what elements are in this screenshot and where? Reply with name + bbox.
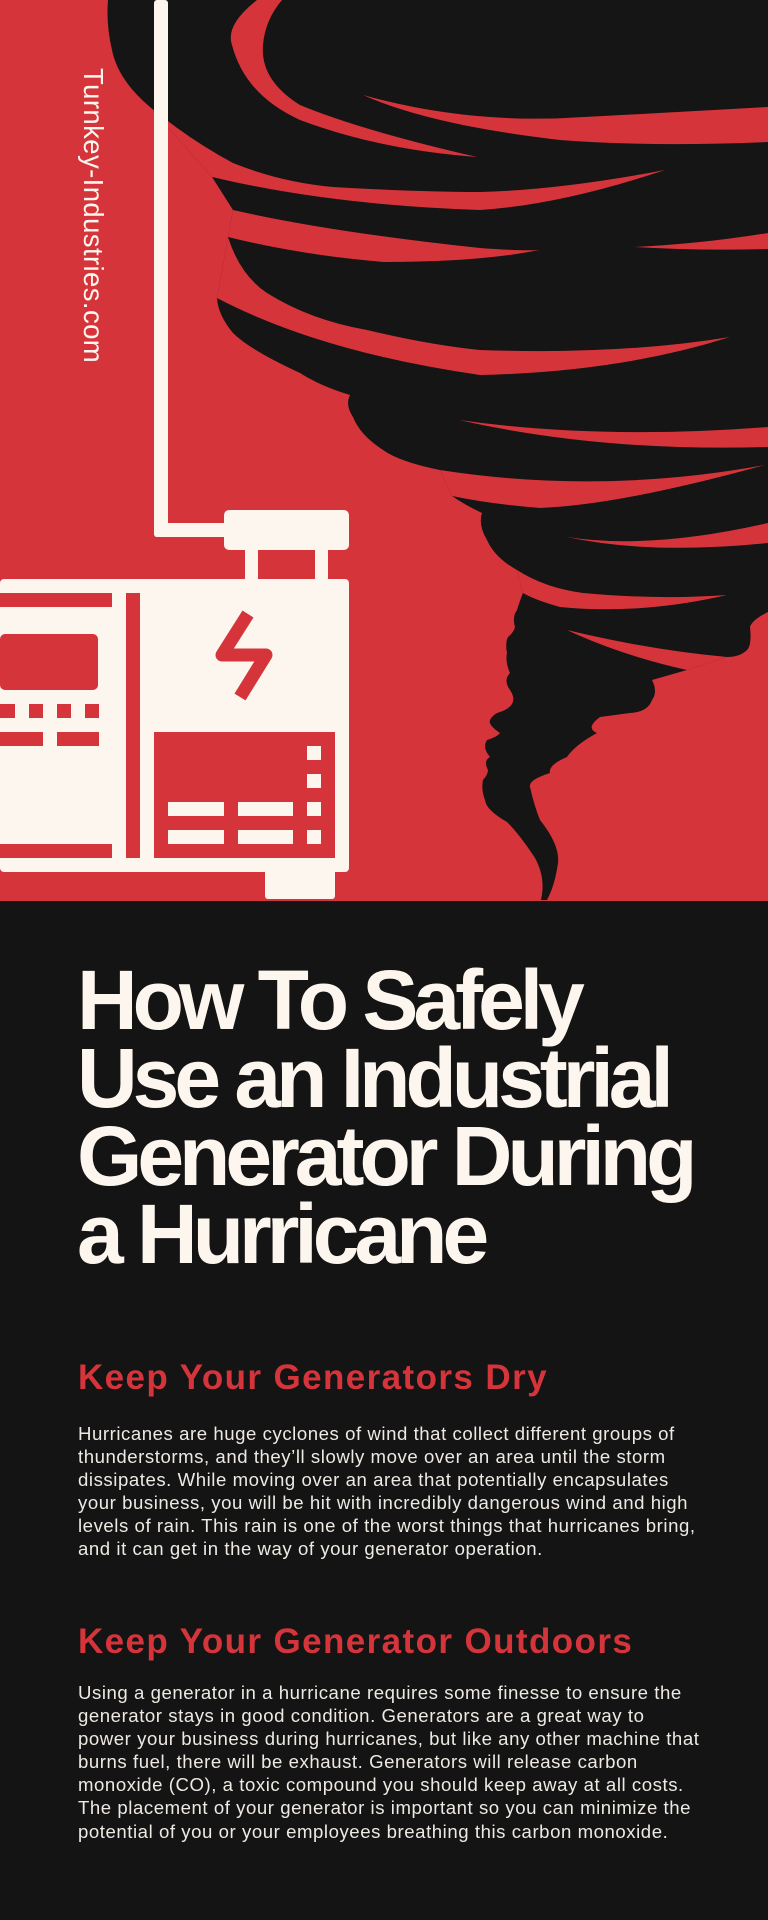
text: dry: thunderstorms, and they’ll slowly move over an area until the storm — [78, 1446, 666, 1467]
text: dry: your business, you will be hit with incredibly dangerous wind and high — [78, 1492, 688, 1513]
text: outdoors: monoxide (CO), a toxic compound you should keep away at all costs. — [78, 1774, 684, 1795]
text: dry: Hurricanes are huge cyclones of wind that collect different groups of — [78, 1423, 675, 1444]
hero illustration panel — [0, 0, 768, 901]
text: dry: levels of rain. This rain is one of the worst things that hurricanes bring, — [78, 1515, 696, 1536]
text: dry — [78, 1423, 696, 1559]
text: outdoors — [78, 1682, 699, 1842]
title: How To Safely — [77, 953, 580, 1047]
text: outdoors: potential of you or your employees breathing this carbon monoxide. — [78, 1821, 668, 1842]
title: Generator During — [77, 1109, 692, 1203]
text: outdoors: Using a generator in a hurricane requires some finesse to ensure the — [78, 1682, 682, 1703]
tornado — [108, 0, 768, 900]
text: outdoors: generator stays in good condition. Generators are a great way to — [78, 1705, 644, 1726]
heading: outdoors: Keep Your Generator Outdoors — [78, 1622, 633, 1661]
vertical cable — [154, 0, 230, 537]
heading: keep generators dry: Keep Your Generators Dry — [78, 1358, 548, 1397]
text: dry: and it can get in the way of your generator operation. — [78, 1538, 543, 1559]
title — [77, 953, 692, 1281]
text: dry: dissipates. While moving over an area that potentially encapsulates — [78, 1469, 669, 1490]
text: outdoors: burns fuel, there will be exhaust. Generators will release carbon — [78, 1751, 638, 1772]
text: outdoors: power your business during hurricanes, but like any other machine that — [78, 1728, 699, 1749]
vertical website text: Turnkey-Industries.com — [78, 68, 109, 363]
title: Use an Industrial — [77, 1031, 669, 1125]
generator — [0, 510, 349, 899]
text: outdoors: The placement of your generator is important so you can minimize the — [78, 1797, 691, 1818]
title: a Hurricane — [77, 1187, 484, 1281]
